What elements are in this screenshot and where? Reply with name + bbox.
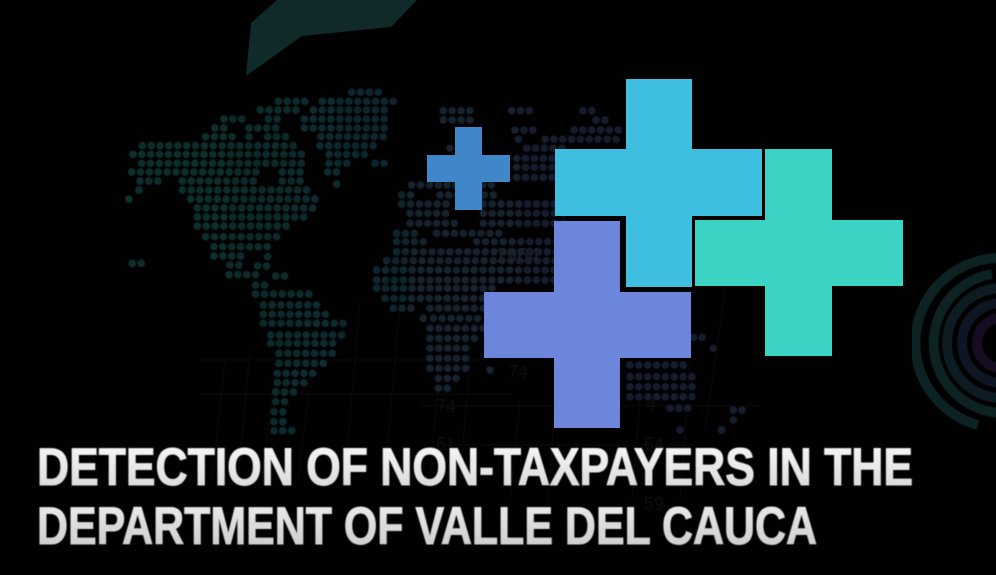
ring 4	[962, 303, 996, 383]
map: asia and australia	[512, 111, 743, 430]
faint background numbers	[436, 245, 664, 514]
ring 1	[915, 258, 996, 425]
dotted world map	[129, 92, 743, 431]
cyan plus	[555, 79, 762, 287]
faint background numbers: 74	[436, 396, 456, 416]
map: europe and africa	[377, 111, 567, 388]
title	[37, 438, 913, 556]
title line 2: DEPARTMENT OF VALLE DEL CAUCA	[37, 497, 817, 556]
ring 3	[947, 288, 996, 398]
map: south america	[256, 285, 348, 431]
purple plus	[484, 221, 691, 428]
map: north america and greenland	[129, 92, 398, 276]
top dark green shape	[246, 0, 417, 76]
faint background numbers: 64	[644, 434, 664, 454]
concentric ring graphic	[915, 258, 996, 425]
ring 2	[934, 274, 996, 413]
faint background numbers: 61	[436, 434, 456, 454]
ring 5	[977, 318, 996, 368]
teal plus	[695, 149, 903, 356]
faint background numbers: 59	[644, 494, 664, 514]
faint background numbers: 74	[508, 362, 528, 382]
small blue plus	[427, 127, 510, 210]
faint background numbers: 1964	[495, 245, 540, 267]
faint background numbers: 4	[646, 394, 656, 414]
